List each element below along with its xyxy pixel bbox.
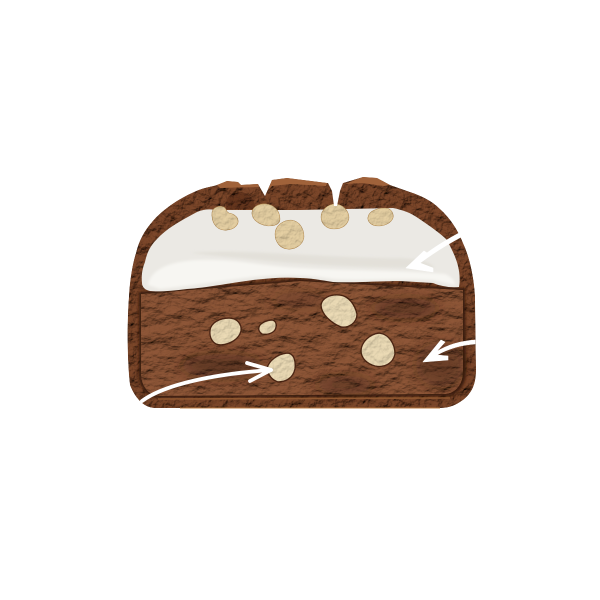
- bottom shell line: [158, 398, 450, 399]
- nut 4: [321, 204, 349, 229]
- nut 9: [321, 295, 357, 327]
- outer chocolate coating: [128, 177, 476, 408]
- inner chocolate lump at top: [226, 192, 255, 209]
- nut 1: [212, 206, 238, 230]
- nut 3: [275, 220, 304, 249]
- arrow: pointer to brownie layer: [423, 340, 475, 362]
- nuts in the brownie layer: [210, 295, 395, 382]
- nut 2: [252, 204, 280, 226]
- nut 6: [210, 318, 241, 345]
- arrow: top pointer to nut: [328, 183, 343, 206]
- dark shaded patches: [180, 354, 264, 378]
- nuts in the cream layer: [212, 204, 393, 249]
- nut 10: [361, 333, 395, 366]
- white cream layer: [142, 208, 460, 291]
- brownie base layer: [139, 279, 466, 408]
- cream shadow beneath highlight: [190, 252, 435, 268]
- nut 7: [259, 320, 276, 334]
- arrow: pointer to cream layer: [406, 232, 463, 272]
- nut 5: [368, 208, 393, 226]
- smooth milk chocolate top: [217, 177, 390, 190]
- nut 8: [267, 353, 295, 382]
- cream highlight: [148, 260, 455, 289]
- arrow: pointer to nut: [142, 363, 271, 401]
